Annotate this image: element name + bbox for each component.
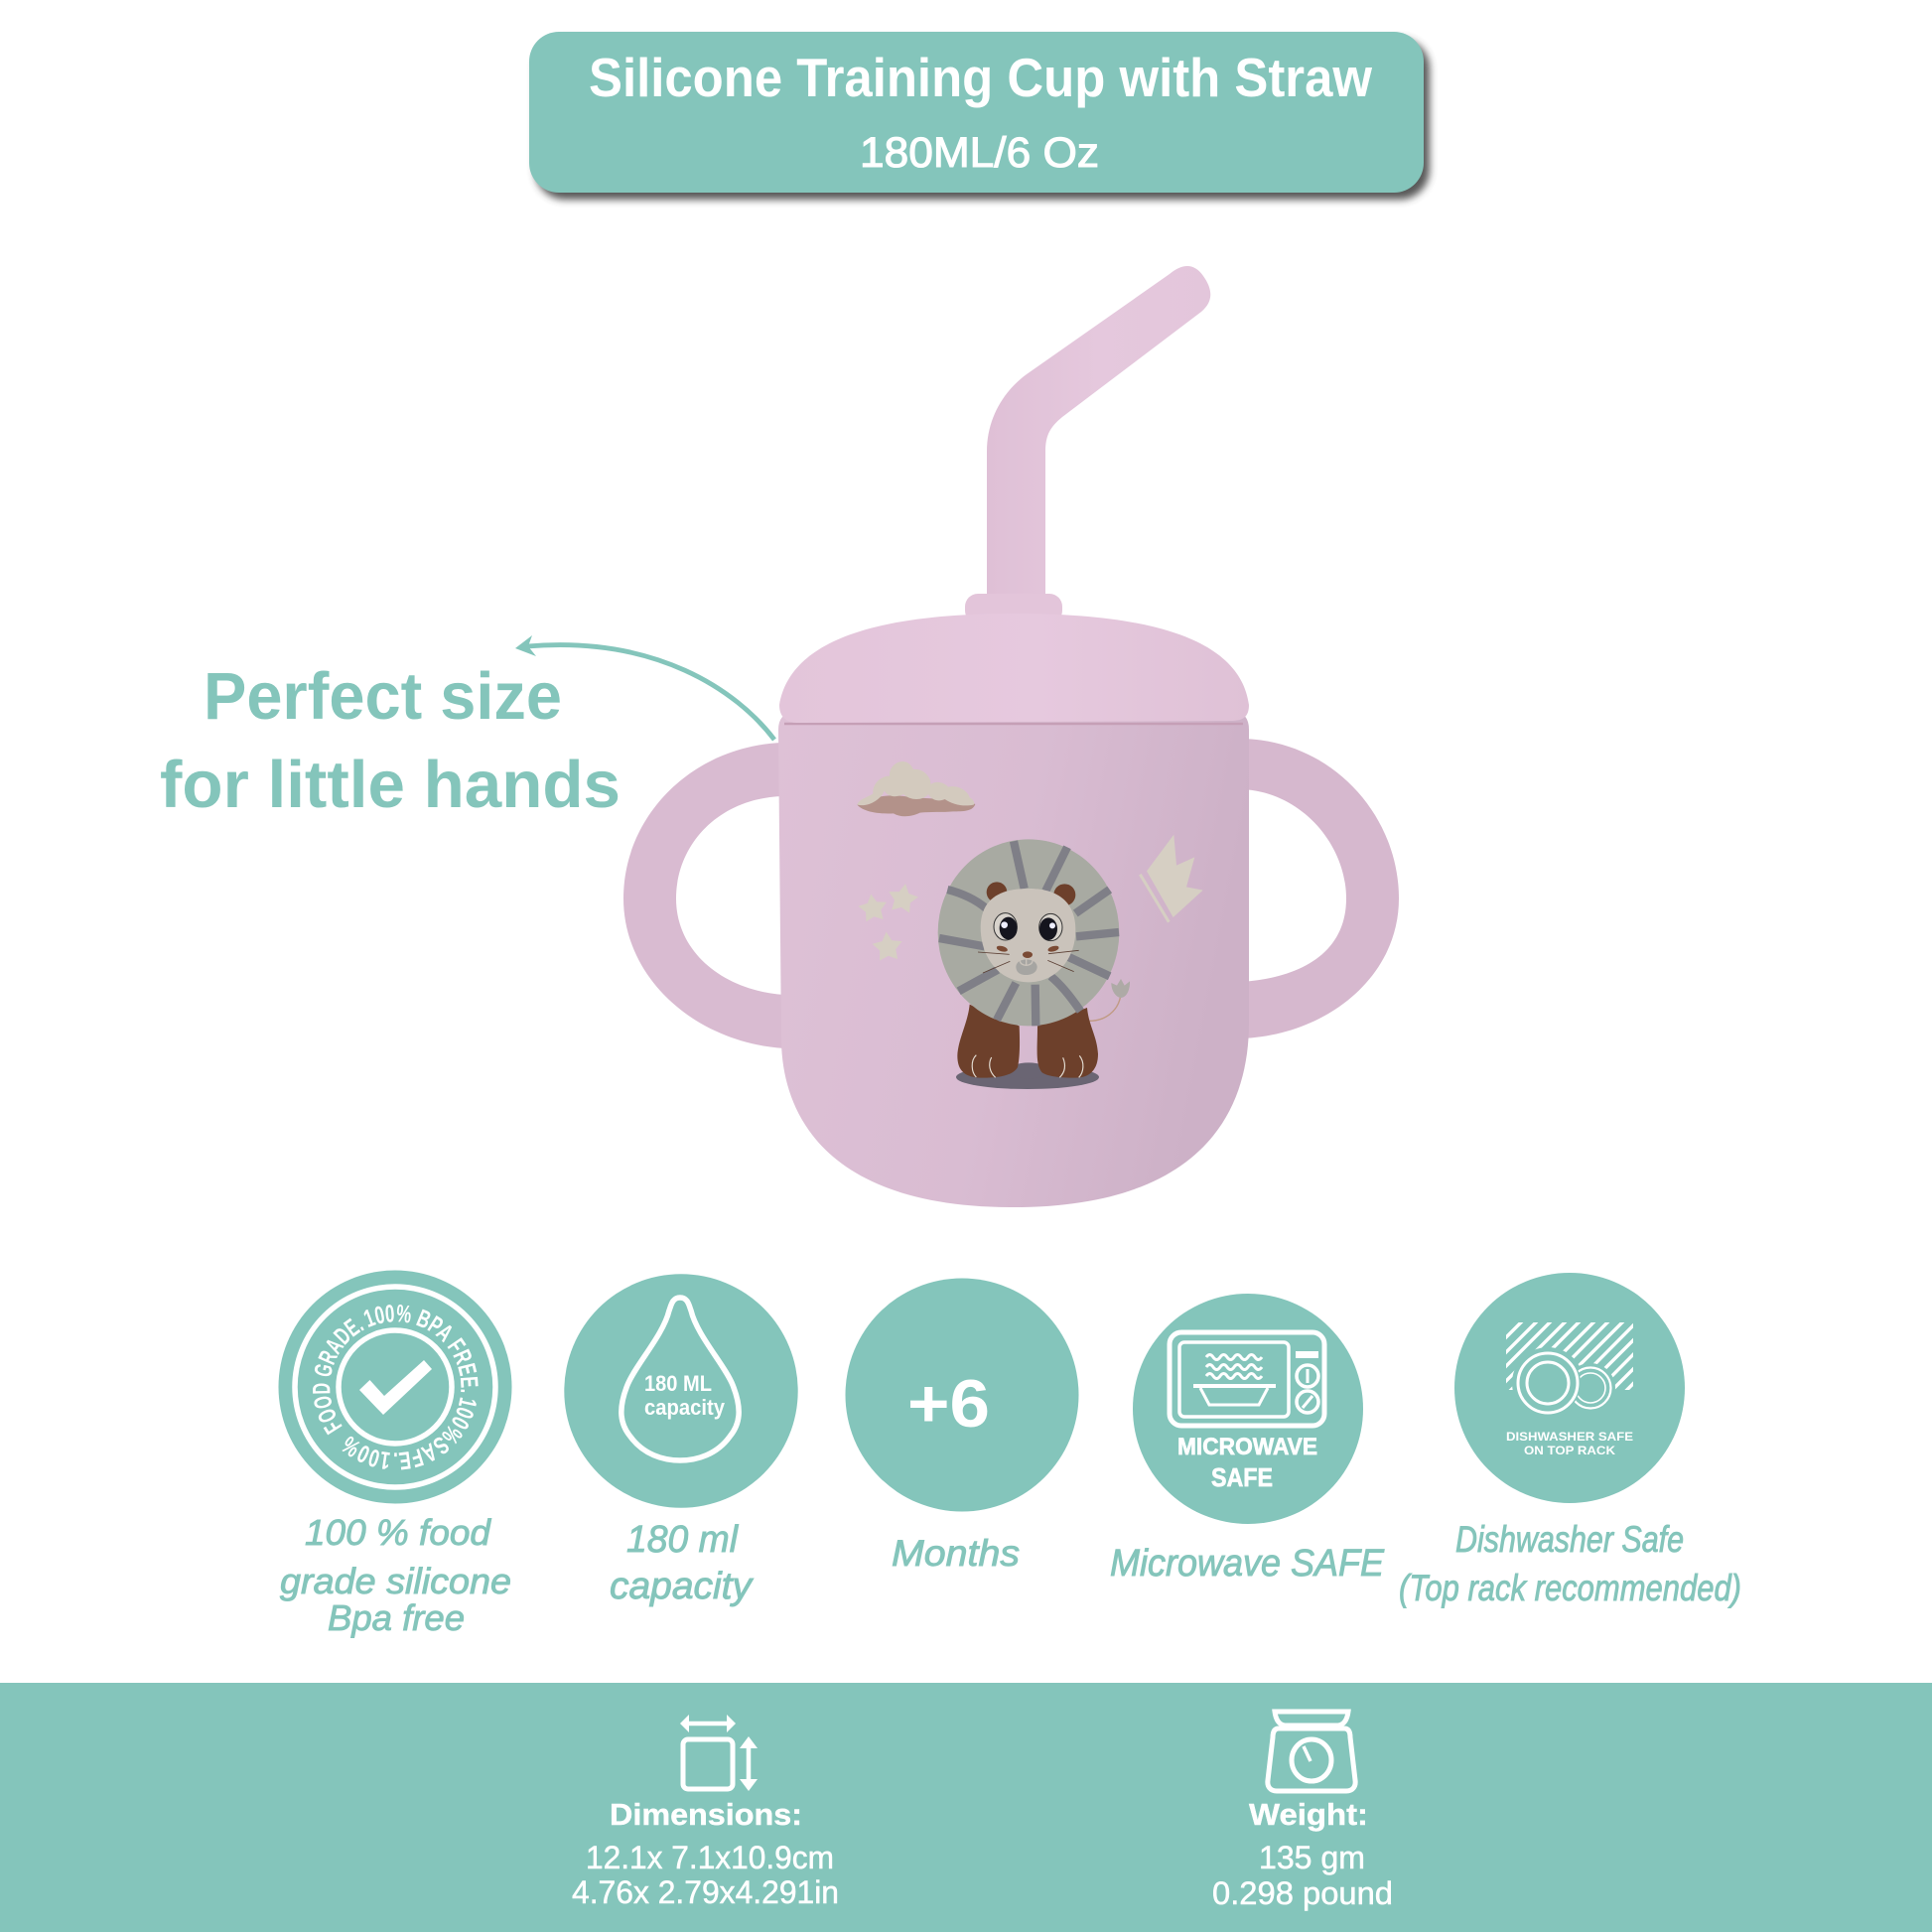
subtitle capacity: 180ML/6 Oz: [860, 129, 1099, 177]
weight text: 135 gm: [1259, 1840, 1365, 1875]
stars: [857, 882, 920, 961]
badge: +6: [846, 1279, 1078, 1511]
dimensions text: 12.1x 7.1x10.9cm: [586, 1840, 834, 1875]
lion cheeks and nose: [996, 945, 1059, 958]
lion ears: [987, 882, 1075, 905]
circular badge text: 100%: [342, 1436, 390, 1469]
icon: dimensions: [680, 1715, 758, 1791]
shadow under lion: [956, 1062, 1099, 1089]
label: 180 ml capacity: capacity: [610, 1566, 754, 1607]
label: dishwasher safe: [1399, 1519, 1741, 1608]
title heading: Silicone Training Cup with Straw: [589, 47, 1372, 108]
product photo: pink silicone cup: [623, 266, 1399, 1207]
badge: microwave safe: [1133, 1294, 1363, 1524]
callout: perfect size for little hands: [160, 635, 774, 822]
icon: water drop: [621, 1298, 739, 1460]
lion muzzle: [1016, 958, 1037, 975]
weight text: [1212, 1797, 1393, 1911]
lion eyes: [994, 913, 1062, 941]
lion claws: [972, 1055, 1083, 1077]
lion tail: [1089, 979, 1130, 1021]
icon: microwave: [1170, 1332, 1324, 1426]
dimensions text: 4.76x 2.79x4.291in: [572, 1874, 839, 1910]
right handle: [1241, 739, 1399, 1038]
weight text: Weight:: [1249, 1797, 1368, 1832]
label: dishwasher safe: (Top rack recommended): [1399, 1568, 1741, 1608]
lion legs: [957, 1005, 1098, 1078]
dimensions text: [572, 1797, 839, 1910]
circular badge text: [313, 1305, 479, 1469]
dishwasher safe text: [1506, 1430, 1633, 1457]
circular badge text: 100% BPA FREE.: [363, 1305, 479, 1392]
arrow to cup: [515, 635, 774, 740]
badge: 180 ml drop: [564, 1274, 798, 1508]
circular badge text: 100%SAFE.: [394, 1398, 477, 1469]
straw: [987, 266, 1210, 621]
lid: [779, 614, 1249, 723]
callout text line 2: for little hands: [160, 748, 621, 822]
mane stripes: [939, 841, 1119, 1026]
crown: [1140, 835, 1203, 922]
badge: 100% food grade: [278, 1271, 512, 1503]
dishwasher safe text: DISHWASHER SAFE: [1506, 1430, 1633, 1444]
lion face: [981, 889, 1075, 982]
callout text line 1: Perfect size: [204, 659, 562, 734]
drop text: [644, 1371, 726, 1420]
label: food grade: 100 % food: [305, 1512, 491, 1553]
lion whiskers: [978, 950, 1079, 973]
left handle: [623, 743, 784, 1048]
drop text: 180 ML: [644, 1371, 712, 1396]
drop text: capacity: [644, 1395, 726, 1420]
label: food grade: Bpa free: [328, 1597, 465, 1638]
weight text: 0.298 pound: [1212, 1875, 1393, 1911]
label: months: Months: [892, 1533, 1020, 1574]
icon: dishwasher stripes and plates: [1506, 1322, 1633, 1414]
title banner: [529, 32, 1430, 200]
badge: +6: +6: [907, 1366, 990, 1442]
label: 180 ml capacity: 180 ml: [626, 1519, 740, 1561]
microwave safe text: [1177, 1434, 1317, 1492]
label: food grade: [280, 1512, 511, 1638]
circular badge text: FOOD GRADE.: [313, 1318, 364, 1436]
straw collar: [965, 594, 1062, 623]
lion decal and decorations: [857, 761, 1203, 1089]
icon: weight scale: [1268, 1712, 1355, 1791]
badge: dishwasher safe: [1454, 1273, 1702, 1503]
microwave safe text: SAFE: [1211, 1462, 1273, 1492]
check mark: [359, 1360, 432, 1415]
dimensions text: Dimensions:: [610, 1797, 802, 1832]
bottom specifications band: [0, 1683, 1932, 1932]
lion mane: [938, 839, 1119, 1026]
label: food grade: grade silicone: [280, 1561, 511, 1601]
label: 180 ml capacity: [610, 1519, 754, 1607]
cup body: [778, 713, 1249, 1207]
cloud: [857, 761, 975, 816]
label: microwave safe: Microwave SAFE: [1110, 1543, 1385, 1585]
label: dishwasher safe: Dishwasher Safe: [1455, 1519, 1684, 1560]
microwave safe text: MICROWAVE: [1177, 1434, 1317, 1460]
dishwasher safe text: ON TOP RACK: [1524, 1444, 1615, 1457]
